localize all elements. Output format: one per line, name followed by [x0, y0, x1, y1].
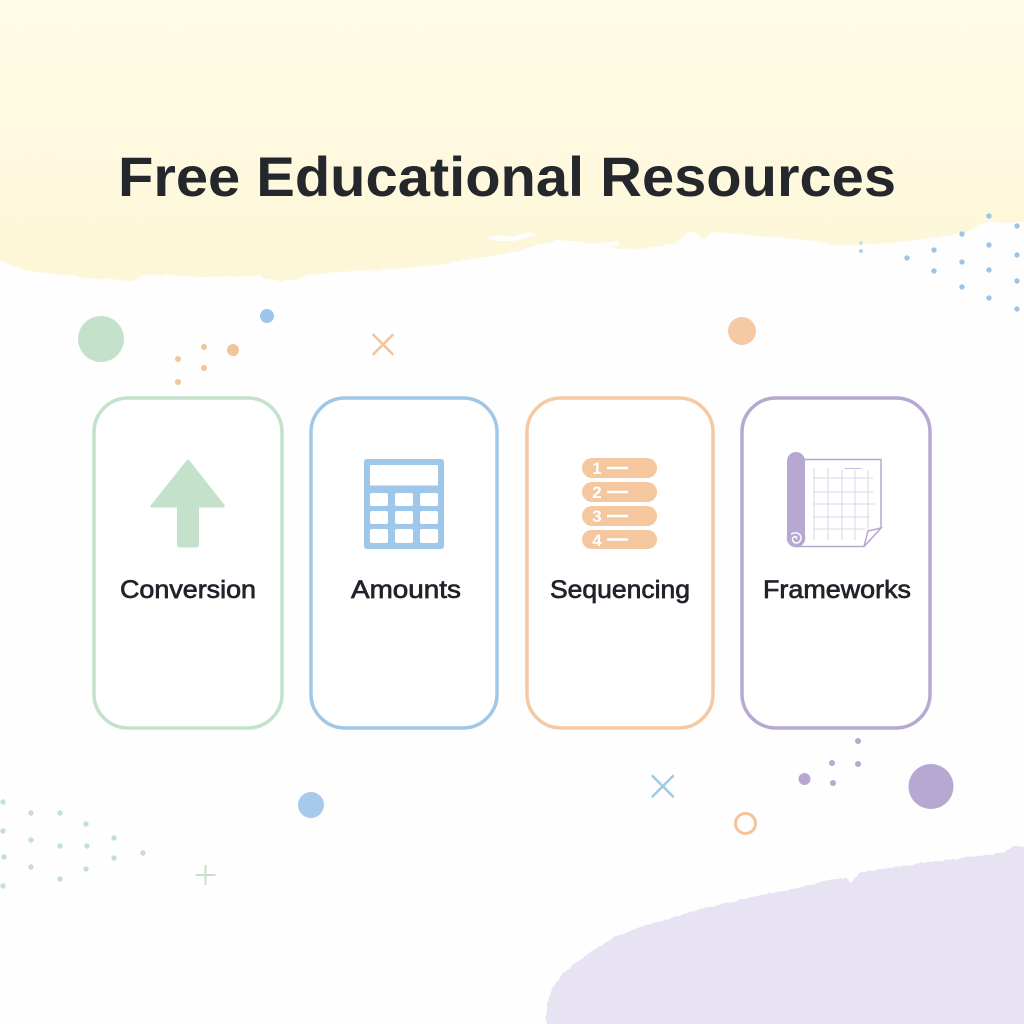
- icon: numbered list: 2: [592, 483, 602, 502]
- decoration: blue cross: [652, 776, 673, 796]
- decoration: orange circle: [728, 317, 756, 345]
- card: Conversion: [94, 398, 282, 728]
- icon: numbered list: 3: [592, 507, 602, 526]
- label: Amounts: Amounts: [351, 576, 461, 604]
- decoration: blue circle: [298, 792, 324, 818]
- card: Frameworks: [742, 398, 930, 728]
- decoration: bottom-left green dots: [0, 799, 146, 889]
- icon: numbered list: 1: [592, 459, 602, 478]
- label: Conversion: Conversion: [120, 576, 256, 604]
- decoration: top-left shapes: [78, 309, 274, 385]
- decoration: orange cross: [374, 335, 392, 354]
- lavender watercolor corner: [546, 846, 1024, 1024]
- decoration: green plus: [196, 865, 216, 885]
- decoration: orange ring: [736, 814, 756, 834]
- icon: numbered list: 4: [592, 531, 602, 550]
- icon: numbered list: [582, 458, 657, 550]
- card: Amounts: [311, 398, 497, 728]
- icon: calculator: [364, 459, 444, 549]
- card: Sequencing: [527, 398, 713, 728]
- label: Frameworks: Frameworks: [763, 576, 911, 604]
- yellow watercolor header band: [0, 0, 1024, 281]
- icon: blueprint scroll: [787, 452, 881, 547]
- title: Free Educational Resources: [118, 145, 896, 208]
- decoration: top-right blue dots: [859, 213, 1020, 312]
- icon: up arrow: [150, 460, 225, 548]
- white flecks in header edge: [486, 232, 620, 248]
- label: Sequencing: Sequencing: [550, 576, 690, 604]
- decoration: bottom-right purple shapes: [798, 738, 954, 809]
